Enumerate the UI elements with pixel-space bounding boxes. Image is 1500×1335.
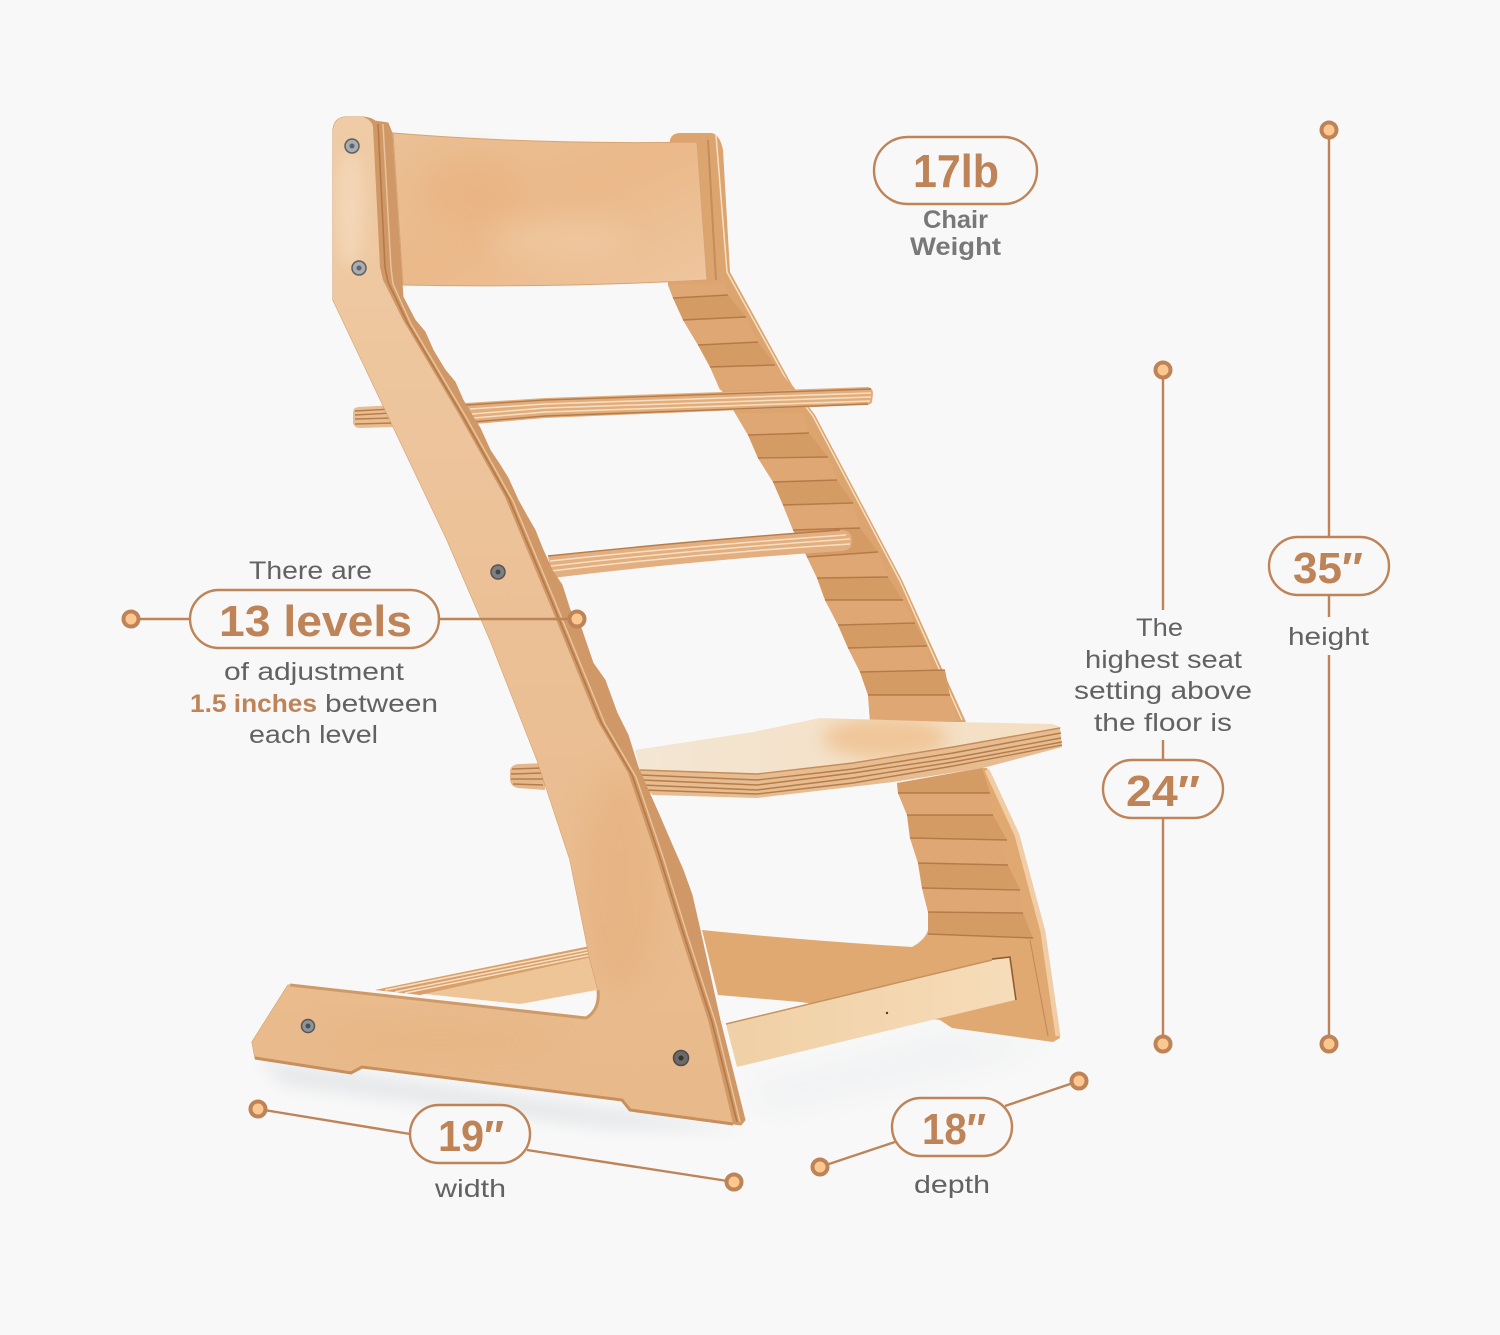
- callout: depth: [812, 1074, 1086, 1199]
- floor shadow: [258, 1030, 1055, 1130]
- levels description: 1.5 inches: [190, 690, 317, 718]
- width pill: [410, 1105, 530, 1163]
- weight label: Weight: [910, 233, 1002, 261]
- back rest panel: [393, 133, 707, 286]
- height line: [1328, 130, 1330, 1044]
- weight pill: [874, 137, 1037, 204]
- seat height line: [1162, 370, 1164, 1044]
- rear upright upper with ladder grooves: [668, 133, 966, 722]
- callout: adjustment levels: [124, 557, 584, 749]
- seat height description: highest seat: [1085, 646, 1242, 674]
- depth pill: [892, 1098, 1012, 1156]
- chair photo illustration: [252, 117, 1062, 1130]
- seat height description: [1074, 614, 1252, 737]
- levels line: [131, 618, 577, 620]
- height value: 35″: [1293, 544, 1363, 593]
- seat height description: The: [1136, 614, 1183, 642]
- width label: width: [434, 1175, 506, 1203]
- callout: width: [250, 1102, 742, 1203]
- rear upright lower with ladder grooves: [702, 768, 1060, 1042]
- levels description: of adjustment: [224, 658, 404, 686]
- height pill: [1269, 537, 1389, 595]
- width endpoints: [250, 1102, 742, 1190]
- rear cross brace: [375, 945, 597, 1004]
- width line: [258, 1109, 734, 1182]
- front side frame with base: [252, 117, 745, 1125]
- seat: [510, 718, 1062, 798]
- depth value: 18″: [922, 1105, 986, 1154]
- lower arm rail: [548, 530, 852, 578]
- seat height endpoints: [1156, 362, 1170, 1052]
- weight label: Chair: [923, 206, 988, 234]
- width value: 19″: [438, 1112, 504, 1161]
- intro text: There are: [249, 557, 372, 585]
- levels value: 13 levels: [219, 597, 412, 646]
- weight label: [910, 206, 1002, 261]
- callout: height: [1269, 122, 1389, 1052]
- depth line: [820, 1081, 1079, 1167]
- seat height value: 24″: [1126, 767, 1200, 816]
- levels pill: [190, 590, 439, 648]
- height endpoints: [1322, 122, 1336, 1052]
- depth endpoints: [812, 1074, 1086, 1174]
- seat height description: the floor is: [1094, 709, 1232, 737]
- seat height description: setting above: [1074, 677, 1252, 705]
- screws: [302, 139, 688, 1066]
- callout: seat height: [1074, 362, 1252, 1052]
- levels description: [190, 658, 438, 749]
- weight value: 17lb: [913, 145, 999, 197]
- upper arm rail: [353, 387, 873, 428]
- levels description: each level: [249, 721, 378, 749]
- levels description: between: [325, 690, 438, 718]
- front cross bar: [726, 957, 1016, 1067]
- seat height pill: [1103, 760, 1223, 818]
- callout: chair weight: [874, 137, 1037, 261]
- depth label: depth: [914, 1171, 990, 1199]
- height label: height: [1288, 623, 1369, 651]
- levels endpoints: [124, 612, 584, 626]
